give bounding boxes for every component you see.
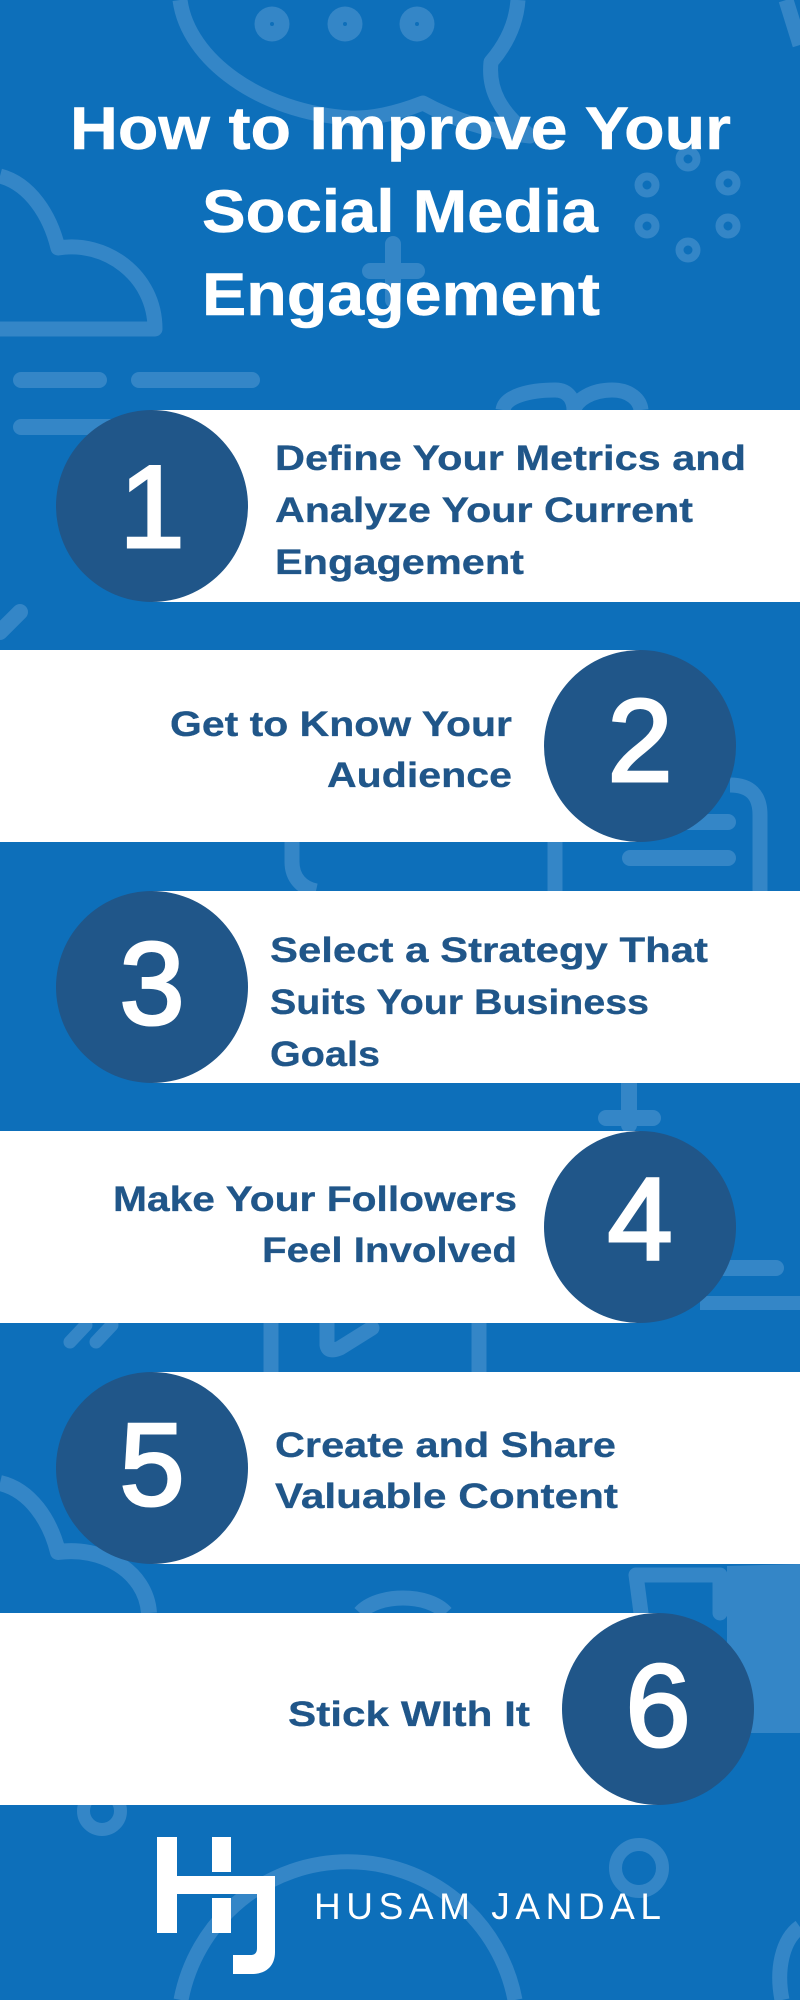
panel: step 3: Select a Strategy That bbox=[270, 931, 708, 970]
title: Engagement bbox=[202, 261, 600, 328]
panel: step 1: Analyze Your Current bbox=[275, 491, 693, 530]
panel: step 3 bbox=[56, 891, 800, 1083]
panel: step 2 bbox=[0, 650, 736, 842]
panel: step 1: Engagement bbox=[275, 543, 524, 582]
title: Social Media bbox=[202, 178, 599, 245]
panel: step 4 bbox=[0, 1131, 736, 1323]
panel: step 6: 6 bbox=[625, 1640, 691, 1771]
title: How to Improve Your bbox=[70, 95, 731, 162]
panel: step 5: Valuable Content bbox=[275, 1477, 618, 1516]
panel: step 2: Get to Know Your bbox=[170, 705, 512, 744]
panel: step 4: 4 bbox=[607, 1153, 673, 1284]
panel: step 2: Audience bbox=[327, 756, 512, 795]
panel: step 3: Suits Your Business bbox=[270, 983, 649, 1022]
panel: step 4: Feel Involved bbox=[262, 1231, 517, 1270]
panel: step 2: 2 bbox=[607, 675, 673, 806]
panel: step 3: Goals bbox=[270, 1035, 380, 1074]
logo wordmark: HUSAM JANDAL bbox=[314, 1886, 661, 1927]
panel: step 1: Define Your Metrics and bbox=[275, 439, 746, 478]
panel: step 3: 3 bbox=[119, 918, 185, 1049]
panel: step 4: Make Your Followers bbox=[113, 1180, 517, 1219]
logo mark: HJ bbox=[157, 1837, 275, 1974]
panel: step 1: 1 bbox=[119, 441, 185, 572]
panel: step 5: Create and Share bbox=[275, 1426, 616, 1465]
panel: step 6 bbox=[0, 1613, 754, 1805]
title bbox=[70, 95, 731, 328]
panel: step 6: Stick WIth It bbox=[288, 1695, 530, 1734]
panel: step 5: 5 bbox=[119, 1399, 185, 1530]
panel: step 5 bbox=[56, 1372, 800, 1564]
panel: step 1 bbox=[56, 410, 800, 602]
